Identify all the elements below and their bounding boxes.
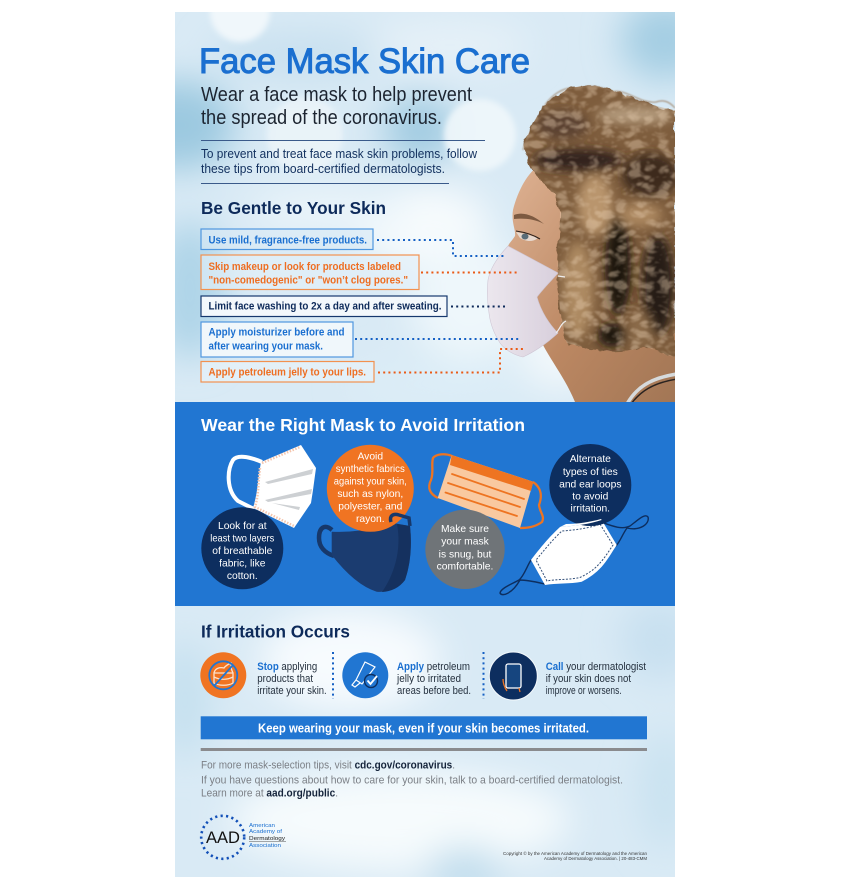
illustration: navy cloth mask xyxy=(319,523,411,592)
illustration: white mask top edge xyxy=(560,519,602,527)
footer text: Learn more at aad.org/public. xyxy=(201,788,338,800)
intro text: these tips from board-certified dermatologists. xyxy=(201,162,445,176)
subtitle xyxy=(201,83,472,129)
tip: skip makeup xyxy=(201,255,419,290)
intro text: To prevent and treat face mask skin problems, follow xyxy=(201,147,478,161)
logo: AAD: Academy of xyxy=(249,829,282,835)
tip text: stop: irritate your skin. xyxy=(257,685,327,697)
callout: alternate ties: to avoid xyxy=(572,492,609,502)
callout: two layers: of breathable xyxy=(212,546,273,557)
callout: two layers: least two layers xyxy=(210,534,274,544)
subtitle: the spread of the coronavirus. xyxy=(201,106,442,129)
panel: background xyxy=(175,12,675,877)
tip text: call xyxy=(546,661,647,697)
footer text: If you have questions about how to care for your skin, talk to a board-certified dermatologist. xyxy=(201,775,623,787)
copyright: Copyright © by the American Academy of Dermatology and the American xyxy=(503,851,648,856)
shirt strap xyxy=(627,374,677,404)
illustration: orange surgical mask xyxy=(429,454,543,528)
logo: AAD xyxy=(201,816,286,859)
connector: limit washing xyxy=(451,306,506,308)
divider: dotted two xyxy=(482,652,484,699)
tip text: apply xyxy=(396,661,471,697)
tip: limit washing: Limit face washing to 2x a day and after sweating. xyxy=(208,300,442,312)
tip text: call: improve or worsens. xyxy=(546,685,622,697)
callout: avoid synthetic: rayon. xyxy=(356,514,385,525)
tip text: apply: areas before bed. xyxy=(397,685,471,697)
callout: snug: comfortable. xyxy=(437,561,493,572)
tip: moisturizer xyxy=(201,322,353,357)
footer text: For more mask-selection tips, visit cdc.gov/coronavirus. xyxy=(201,759,455,771)
callout: two layers: Look for at xyxy=(218,521,267,532)
connector: moisturizer xyxy=(355,338,521,340)
banner: keep wearing: Keep wearing your mask, even if your skin becomes irritated. xyxy=(258,720,589,735)
connector: mild products xyxy=(377,240,506,256)
intro text xyxy=(201,140,485,184)
heading: be gentle: Be Gentle to Your Skin xyxy=(201,198,386,218)
callout: snug: your mask xyxy=(441,537,490,548)
callout: two layers xyxy=(201,507,283,589)
logo: AAD: AAD xyxy=(206,829,240,847)
tip text: stop: Stop applying xyxy=(257,661,317,673)
banner: keep wearing xyxy=(201,716,647,739)
subtitle: Wear a face mask to help prevent xyxy=(201,83,472,106)
footer text xyxy=(201,759,623,800)
tip: skip makeup: Skip makeup or look for products labeled xyxy=(208,261,401,273)
heading: right mask: Wear the Right Mask to Avoid Irritation xyxy=(201,415,525,435)
callout: two layers: cotton. xyxy=(227,571,258,582)
logo: AAD: Dermatology xyxy=(249,836,285,842)
tip: moisturizer: Apply moisturizer before and xyxy=(208,327,344,339)
icon: call dermatologist xyxy=(489,652,537,700)
logo: AAD: American xyxy=(249,823,275,829)
logo: AAD: Association xyxy=(249,843,281,849)
callout: alternate ties: types of ties xyxy=(563,467,618,478)
connector: petroleum jelly xyxy=(378,349,523,372)
tip text: call: if your skin does not xyxy=(546,673,632,685)
title: Face Mask Skin Care xyxy=(199,42,530,81)
callout: avoid synthetic: synthetic fabrics xyxy=(336,464,405,475)
illustration: navy mask ear loop xyxy=(390,514,410,526)
callout: snug: is snug, but xyxy=(439,549,491,560)
eye and eyebrow xyxy=(514,214,544,241)
callout: avoid synthetic xyxy=(327,445,414,532)
skin: face and neck xyxy=(508,165,675,402)
tip: petroleum jelly: Apply petroleum jelly to your lips. xyxy=(208,366,366,378)
callout: alternate ties: irritation. xyxy=(571,504,610,514)
tip: petroleum jelly xyxy=(201,362,374,382)
tip text: call: Call your dermatologist xyxy=(546,661,647,673)
callout: alternate ties: and ear loops xyxy=(559,479,622,490)
copyright xyxy=(503,851,648,861)
callout: alternate ties xyxy=(549,444,631,526)
tip: mild products xyxy=(201,229,373,250)
tip text: stop: products that xyxy=(257,673,314,685)
panel: wear the right mask xyxy=(175,402,675,606)
callout: alternate ties: Alternate xyxy=(570,454,611,465)
tip text: apply: Apply petroleum xyxy=(397,661,470,673)
mask on face xyxy=(487,246,566,357)
callout: avoid synthetic: polyester, and xyxy=(338,502,403,512)
tip: skip makeup: "non-comedogenic" or "won’t clog pores." xyxy=(208,274,408,286)
connector: skip makeup xyxy=(421,272,517,274)
callout: avoid synthetic: Avoid xyxy=(358,452,383,462)
callout: snug: Make sure xyxy=(441,524,489,535)
callout: avoid synthetic: such as nylon, xyxy=(337,489,403,500)
photo: woman wearing a mask xyxy=(487,80,680,404)
divider bar xyxy=(201,748,647,751)
tip: limit washing xyxy=(201,296,447,316)
callout: two layers: fabric, like xyxy=(219,558,266,570)
illustration: white pleated mask xyxy=(229,445,316,528)
heading: if irritation occurs: If Irritation Occurs xyxy=(201,622,350,642)
tip text: apply: jelly to irritated xyxy=(396,673,461,685)
callout: avoid synthetic: against your skin, xyxy=(334,476,407,488)
icon: apply jelly xyxy=(342,652,388,698)
tip: moisturizer: after wearing your mask. xyxy=(208,340,323,352)
icon: stop products xyxy=(200,652,246,698)
callout: snug xyxy=(425,510,505,589)
illustration: white mask with ties xyxy=(500,516,648,595)
copyright: Academy of Dermatology Association. | 20-483-CMM xyxy=(544,856,647,861)
tip: mild products: Use mild, fragrance-free products. xyxy=(208,234,367,246)
tip text: stop xyxy=(257,661,327,697)
hair xyxy=(522,84,675,356)
divider: dotted one xyxy=(332,652,334,699)
